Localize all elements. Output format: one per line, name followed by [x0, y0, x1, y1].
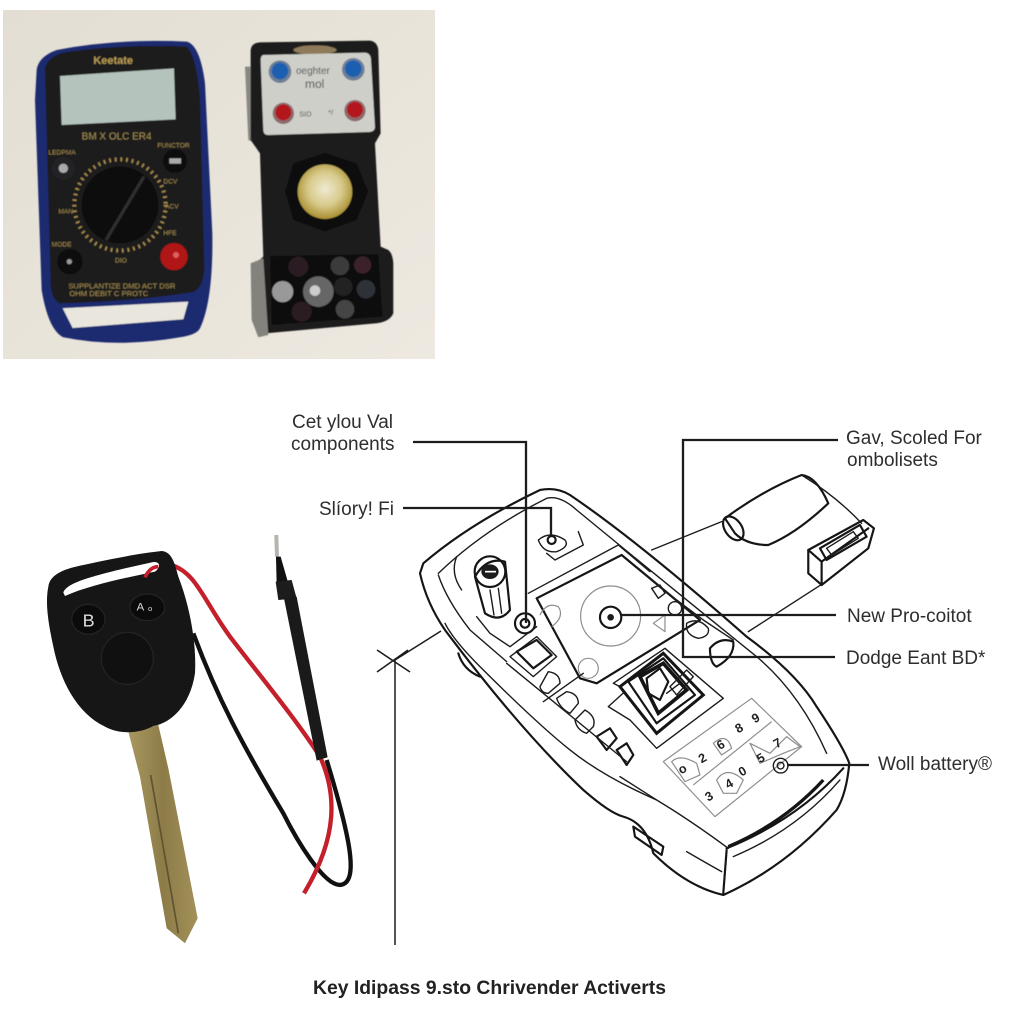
multimeter small labels: FUNCTOR	[157, 142, 190, 149]
tester panel buttons	[269, 58, 366, 124]
number keypad: 8	[733, 720, 746, 736]
tester panel text: SID	[299, 110, 312, 119]
diagram: exploded key fob line drawing	[420, 475, 874, 895]
tester silver panel	[261, 53, 375, 135]
panel: photo of multimeter and tester	[3, 10, 435, 359]
handheld tester	[245, 41, 393, 337]
tester panel text: mol	[305, 77, 324, 91]
tester panel text: oeghter	[296, 66, 331, 77]
number keypad	[663, 698, 802, 817]
connector leads	[652, 522, 823, 632]
label: scoled: ombolisets	[847, 450, 938, 471]
label: components: Cet ylou Val	[292, 412, 393, 433]
fob buttons	[72, 594, 165, 684]
test probe	[274, 535, 328, 761]
multimeter small labels: ACV	[165, 203, 179, 210]
cylinder connector	[475, 556, 510, 618]
key blade	[128, 725, 198, 943]
component row	[454, 557, 633, 765]
number keypad: o	[676, 761, 690, 777]
multimeter small labels: HFE	[163, 230, 177, 237]
multimeter small labels: OHM DEBIT C PROTC	[69, 289, 149, 298]
number keypad: 0	[736, 764, 749, 779]
center board	[528, 545, 700, 683]
multimeter small labels: MAN	[58, 208, 73, 215]
multimeter screen	[60, 68, 176, 125]
number keypad: 5	[754, 750, 767, 766]
multimeter small labels: LEDPMA	[48, 150, 76, 157]
multimeter model text: BM X OLC ER4	[82, 131, 152, 142]
fob buttons: B	[83, 611, 95, 631]
tester panel text	[296, 66, 334, 119]
red wire	[172, 565, 331, 893]
tester gold coin	[285, 153, 368, 232]
callout leader lines	[377, 440, 869, 945]
device shell	[420, 489, 849, 895]
label: components: components	[291, 434, 395, 455]
caption: Key Idipass 9.sto Chrivender Activerts	[313, 978, 666, 999]
number keypad: 6	[714, 737, 727, 753]
multimeter small labels	[48, 142, 190, 298]
red wire loop	[145, 567, 158, 577]
label: scoled: Gav, Scoled For	[846, 428, 983, 449]
number keypad: 3	[703, 789, 716, 804]
tester panel text: */	[328, 108, 334, 117]
illustration: key fob with test leads	[47, 535, 351, 943]
multimeter dial	[82, 167, 158, 243]
number keypad: 4	[723, 776, 736, 792]
number keypad: 2	[696, 750, 709, 766]
multimeter dial scale	[74, 159, 166, 251]
multimeter handle cutout	[63, 302, 188, 328]
label: dodge: Dodge Eant BD*	[846, 648, 986, 669]
fob buttons: A ₒ	[137, 602, 152, 614]
number keypad: 7	[771, 735, 784, 751]
right side components	[638, 568, 733, 667]
battery pack	[719, 475, 874, 585]
multimeter small labels: MODE	[52, 242, 72, 249]
multimeter small labels: DIO	[115, 257, 127, 264]
label: new pro: New Pro-coitot	[847, 606, 972, 627]
tester connector block	[270, 254, 383, 325]
black wire	[193, 633, 351, 885]
multimeter small labels: DCV	[163, 178, 178, 185]
multimeter brand: Keetate	[93, 55, 133, 67]
multimeter small labels: SUPPLANTIZE DMD ACT DSR	[68, 281, 176, 290]
number keypad: 9	[749, 710, 762, 726]
multimeter buttons	[52, 149, 188, 274]
label: slory: Slíory! Fi	[319, 499, 394, 520]
upper post	[538, 532, 583, 560]
key fob body	[47, 551, 195, 732]
key ring slot	[63, 562, 159, 596]
label: battery: Woll battery®	[878, 754, 992, 775]
central chip	[608, 648, 723, 748]
multimeter	[35, 41, 212, 343]
